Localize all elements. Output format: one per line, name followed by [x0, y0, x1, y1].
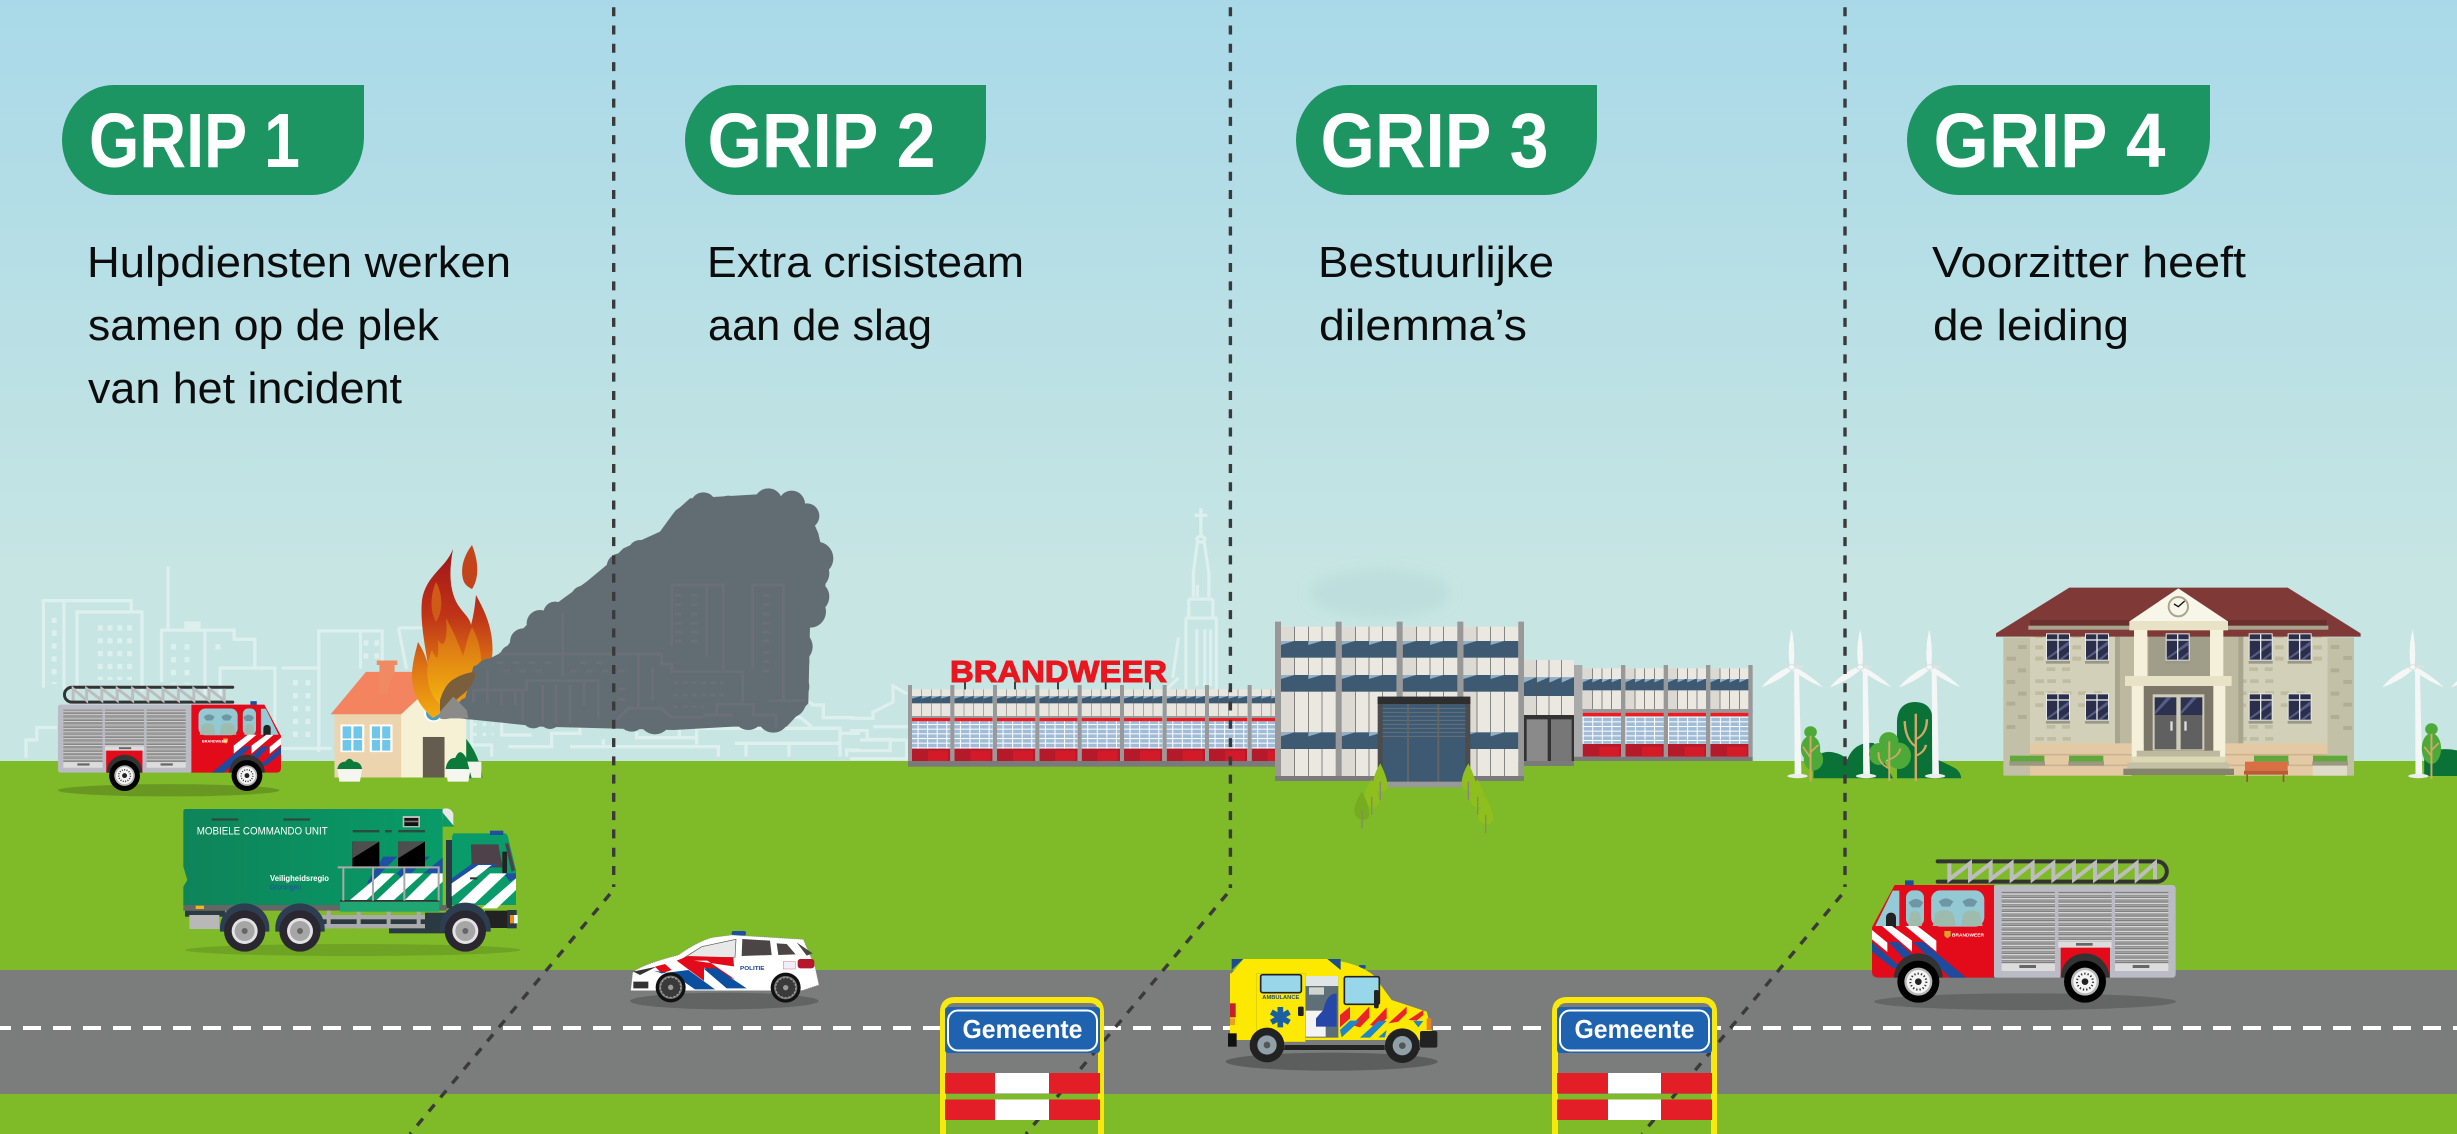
region label: Veiligheidsregio: [270, 873, 329, 883]
house: [331, 660, 482, 782]
house rear tree: [455, 739, 482, 779]
fire engine left: [58, 687, 281, 796]
grass field: [0, 761, 2457, 1134]
flames: [412, 545, 493, 718]
heading: GRIP 2: GRIP 2: [708, 98, 936, 184]
region name: Groningen: [270, 882, 301, 892]
heading: GRIP 1: [62, 85, 364, 195]
fire engine right: [1872, 861, 2176, 1010]
heading: GRIP 1: GRIP 1: [89, 98, 300, 184]
fire engine logo text: BRANDWEER: [202, 740, 227, 744]
municipality sign 2: [1555, 1000, 1714, 1134]
house walls: [334, 714, 404, 778]
church spire skyline: [850, 508, 1217, 759]
mobile command unit: [183, 808, 520, 956]
skyline seen through smoke: [473, 585, 805, 728]
roof: [1996, 588, 2361, 637]
right wing: [1574, 665, 1753, 761]
roof: [331, 672, 466, 714]
entrance doors: [2144, 686, 2214, 751]
text: GRIP 1 description: van het incident: [88, 364, 402, 413]
sign posts: [965, 682, 1150, 689]
balcony railing: [338, 866, 440, 912]
text: GRIP 2 description: [707, 238, 1024, 350]
text: GRIP 2 description: Extra crisisteam: [707, 238, 1024, 287]
unit label: MOBIELE COMMANDO UNIT: [197, 826, 328, 838]
municipality sign 2: Gemeente: [1574, 1014, 1694, 1044]
wind turbines and trees: [1761, 630, 2457, 781]
windows: [2046, 633, 2312, 724]
city skyline left: [26, 567, 472, 758]
heading: GRIP 3: [1296, 85, 1597, 195]
road: [0, 970, 2457, 1094]
tree 1: [1801, 726, 1823, 781]
dashed boundary line 2: [1026, 0, 1230, 1134]
heading: GRIP 4: GRIP 4: [1934, 98, 2166, 184]
door: [423, 737, 445, 778]
dashed boundary line 3: [1642, 0, 1845, 1134]
right tree: [2422, 723, 2441, 779]
bench: [2244, 762, 2288, 782]
heading: GRIP 2: [685, 85, 986, 195]
text: GRIP 3 description: dilemma’s: [1319, 301, 1527, 350]
main fire station: [1275, 570, 1753, 833]
ambulance: [1226, 959, 1438, 1071]
heading: GRIP 3: GRIP 3: [1320, 98, 1548, 184]
entrance trees: [1354, 763, 1493, 833]
ambulance label: AMBULANCE: [1262, 995, 1300, 1001]
municipality sign 1: [943, 1000, 1101, 1134]
text: GRIP 1 description: [87, 238, 511, 413]
tree 2: [1869, 732, 1911, 781]
text: GRIP 4 description: de leiding: [1933, 301, 2129, 350]
steps: [2123, 751, 2234, 775]
text: GRIP 4 description: [1932, 238, 2246, 350]
municipality sign 1: Gemeente: [962, 1014, 1082, 1044]
text: GRIP 1 description: samen op de plek: [88, 301, 440, 350]
smoke base over flame: [440, 672, 475, 713]
planters: [2009, 756, 2348, 776]
fire engine logo text: BRANDWEER: [1952, 932, 1985, 937]
police car: [630, 931, 819, 1009]
side block: [1524, 660, 1574, 766]
gable round window: [425, 706, 442, 721]
text: GRIP 4 description: Voorzitter heeft: [1932, 238, 2246, 287]
windows: [340, 724, 392, 752]
text: GRIP 3 description: Bestuurlijke: [1318, 238, 1554, 287]
right bush: [2424, 749, 2457, 776]
text: GRIP 2 description: aan de slag: [708, 301, 932, 350]
chimney: [377, 660, 397, 693]
town hall: [1996, 588, 2361, 782]
text: GRIP 1 description: Hulpdiensten werken: [87, 238, 511, 287]
pediment and clock: [2130, 588, 2227, 621]
heading: GRIP 4: [1907, 85, 2210, 195]
long fire station: [908, 682, 1290, 767]
text: GRIP 3 description: [1318, 238, 1554, 350]
police label: POLITIE: [740, 966, 765, 972]
smoke cloud: [440, 488, 833, 734]
city skyline behind smoke, right: [467, 700, 940, 760]
smoke source over roof: [440, 697, 468, 719]
sky background: [0, 0, 2457, 762]
faint smoke haze: [1310, 570, 1450, 617]
dashed boundary line 1: [410, 0, 614, 1134]
roll door: [1378, 697, 1470, 787]
tree 3: [1905, 714, 1927, 781]
plants: [337, 752, 481, 782]
bushes: [1813, 702, 1961, 778]
BRANDWEER sign: BRANDWEER: [950, 654, 1167, 689]
